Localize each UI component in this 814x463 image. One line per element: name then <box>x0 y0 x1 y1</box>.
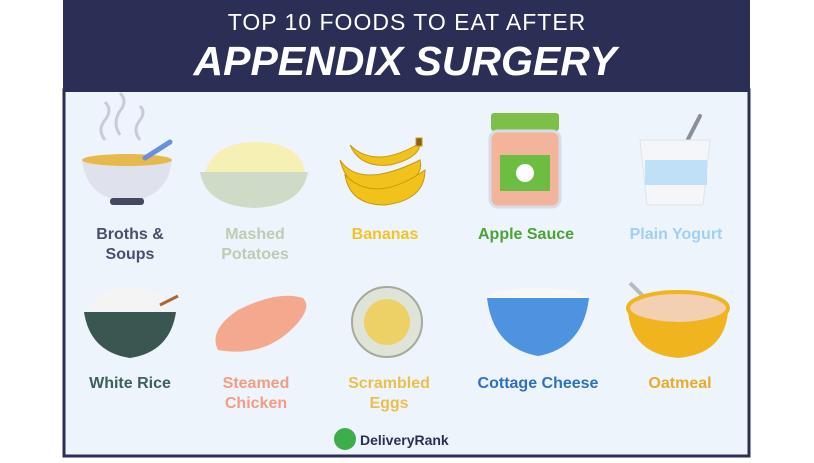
icon: soup bowl <box>82 93 172 205</box>
icon: mashed potatoes <box>200 142 308 208</box>
logo: DeliveryRank <box>334 428 449 450</box>
title line 2: APPENDIX SURGERY <box>192 38 620 84</box>
icon: yogurt cup <box>640 116 710 205</box>
label: Broths & Soups: Soups <box>106 246 155 263</box>
label: Steamed Chicken: Chicken <box>225 395 287 412</box>
label: Oatmeal: Oatmeal <box>648 375 712 392</box>
label: Mashed Potatoes: Potatoes <box>221 246 289 263</box>
label: Apple Sauce: Apple Sauce <box>478 226 574 243</box>
label: Plain Yogurt: Plain Yogurt <box>630 226 723 243</box>
label: Cottage Cheese: Cottage Cheese <box>478 375 599 392</box>
panel: background <box>64 90 749 456</box>
title line 1: TOP 10 FOODS TO EAT AFTER <box>228 9 586 35</box>
icon: chicken breast <box>216 296 306 352</box>
icon: rice bowl <box>84 288 178 358</box>
label: Scrambled Eggs: Eggs <box>369 395 409 412</box>
label: White Rice: White Rice <box>89 375 171 392</box>
icon: oatmeal bowl <box>628 283 728 358</box>
label: Scrambled Eggs: Scrambled <box>348 375 430 392</box>
header <box>63 0 750 92</box>
icon: scrambled eggs <box>352 287 422 357</box>
icon: bananas <box>340 138 425 205</box>
label: Steamed Chicken: Steamed <box>223 375 289 392</box>
label: Bananas: Bananas <box>352 226 418 243</box>
logo: DeliveryRank: DeliveryRank <box>360 432 449 448</box>
icon: apple sauce jar <box>490 113 560 207</box>
label: Mashed Potatoes: Mashed <box>225 226 285 243</box>
label: Broths & Soups: Broths & <box>96 226 164 243</box>
icon: cottage cheese bowl <box>487 288 589 356</box>
